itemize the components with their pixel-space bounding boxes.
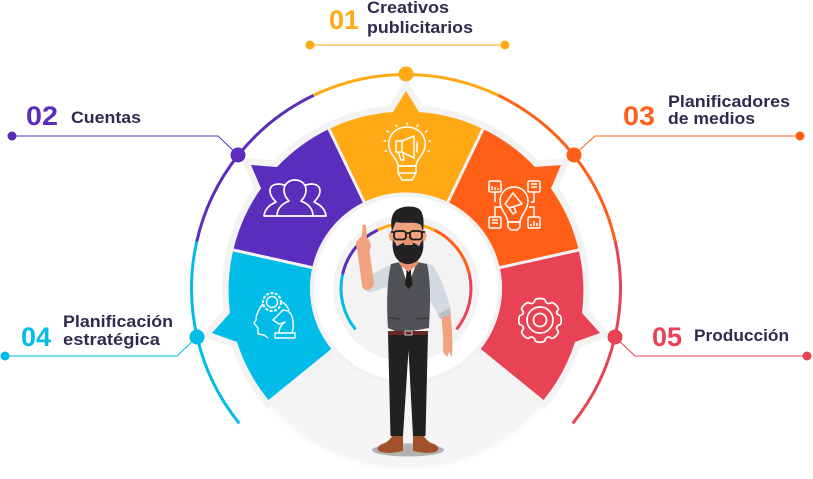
shadow — [372, 444, 444, 456]
callout 02: Cuentas — [71, 109, 141, 127]
vest — [387, 262, 430, 331]
segment: 03 orange — [448, 129, 579, 268]
belt — [388, 331, 428, 335]
callout 03: de medios — [668, 110, 755, 128]
shirt and sleeves — [364, 263, 451, 316]
outer ring arcs — [192, 74, 620, 423]
inner ring arcs — [341, 224, 471, 329]
segment: 02 purple — [233, 129, 364, 268]
icon: gear — [519, 298, 561, 342]
callout 03 — [566, 93, 804, 162]
glasses — [391, 231, 425, 240]
center discs — [310, 192, 502, 384]
nose and mouth — [404, 235, 413, 245]
tie — [405, 267, 412, 289]
trousers — [388, 333, 428, 436]
separators — [233, 129, 579, 268]
shoes — [378, 436, 403, 453]
callout 05: 05 — [652, 322, 682, 352]
raised arm and hand — [357, 248, 374, 290]
icon: lightbulb megaphone — [384, 123, 430, 180]
callout 04: estratégica — [63, 331, 161, 349]
icon: bulb with charts — [489, 181, 540, 230]
callout 02: 02 — [26, 101, 58, 131]
backing disc — [212, 91, 600, 468]
callout 01: publicitarios — [367, 19, 473, 37]
callout 03: 03 — [623, 101, 655, 131]
hair — [391, 207, 424, 232]
segment: 01 amber — [329, 91, 483, 202]
figure: man — [356, 207, 452, 456]
callout 01 — [306, 0, 510, 82]
callout 04: 04 — [21, 322, 51, 352]
icon: head with gear and chess knight — [254, 293, 295, 338]
callout 03: Planificadores — [668, 93, 790, 111]
callout 01: 01 — [329, 5, 359, 35]
segment: 04 cyan — [212, 250, 331, 400]
icon: people — [264, 180, 326, 216]
right arm — [441, 309, 452, 357]
callout 05 — [608, 322, 812, 360]
callout 05: Producción — [694, 327, 789, 345]
neck, face — [399, 250, 418, 272]
callout 04: Planificación — [63, 313, 173, 331]
beard — [393, 239, 423, 264]
callout 04 — [0, 313, 204, 360]
segment: 05 red — [481, 250, 600, 400]
callout 02 — [8, 101, 246, 162]
